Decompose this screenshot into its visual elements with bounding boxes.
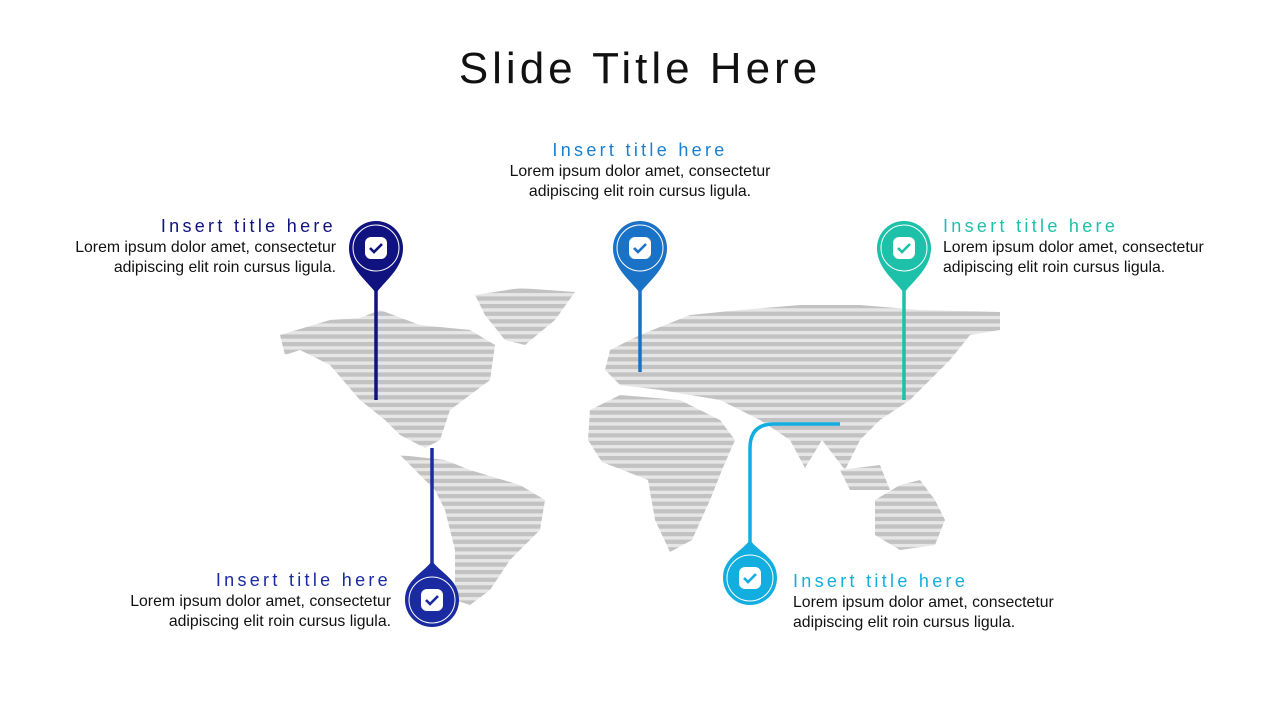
text: top middle [510,140,770,200]
pin: blue top-middle [613,221,667,372]
title: Slide Title Here [459,44,821,93]
map [280,288,1000,605]
text: bottom left: Insert title here [216,570,391,590]
text: top middle: Insert title here [552,140,728,160]
text: top middle: Lorem ipsum dolor amet, consectetur [510,163,770,180]
text: top left [75,216,336,276]
text: bottom left [130,570,391,630]
text: bottom right: Insert title here [793,571,968,591]
text: bottom left: Lorem ipsum dolor amet, consectetur [130,593,391,610]
text: top right [943,216,1204,276]
text: top left: adipiscing elit roin cursus ligula. [114,258,336,276]
text: bottom right: adipiscing elit roin cursus ligula. [793,614,1015,630]
text: bottom right [793,571,1054,630]
pin: navy bottom-left [405,448,459,627]
text: top left: Lorem ipsum dolor amet, consectetur [75,239,336,256]
text: bottom right: Lorem ipsum dolor amet, consectetur [793,594,1054,611]
text: top right: adipiscing elit roin cursus ligula. [943,258,1165,276]
pin: cyan bottom-right [723,424,840,605]
text: top middle: adipiscing elit roin cursus ligula. [529,182,751,200]
text: top left: Insert title here [161,216,336,236]
text: top right: Lorem ipsum dolor amet, consectetur [943,239,1204,256]
text: top right: Insert title here [943,216,1118,236]
pin: teal top-right [877,221,931,400]
pin: navy top-left [349,221,403,400]
text: bottom left: adipiscing elit roin cursus ligula. [169,612,391,630]
